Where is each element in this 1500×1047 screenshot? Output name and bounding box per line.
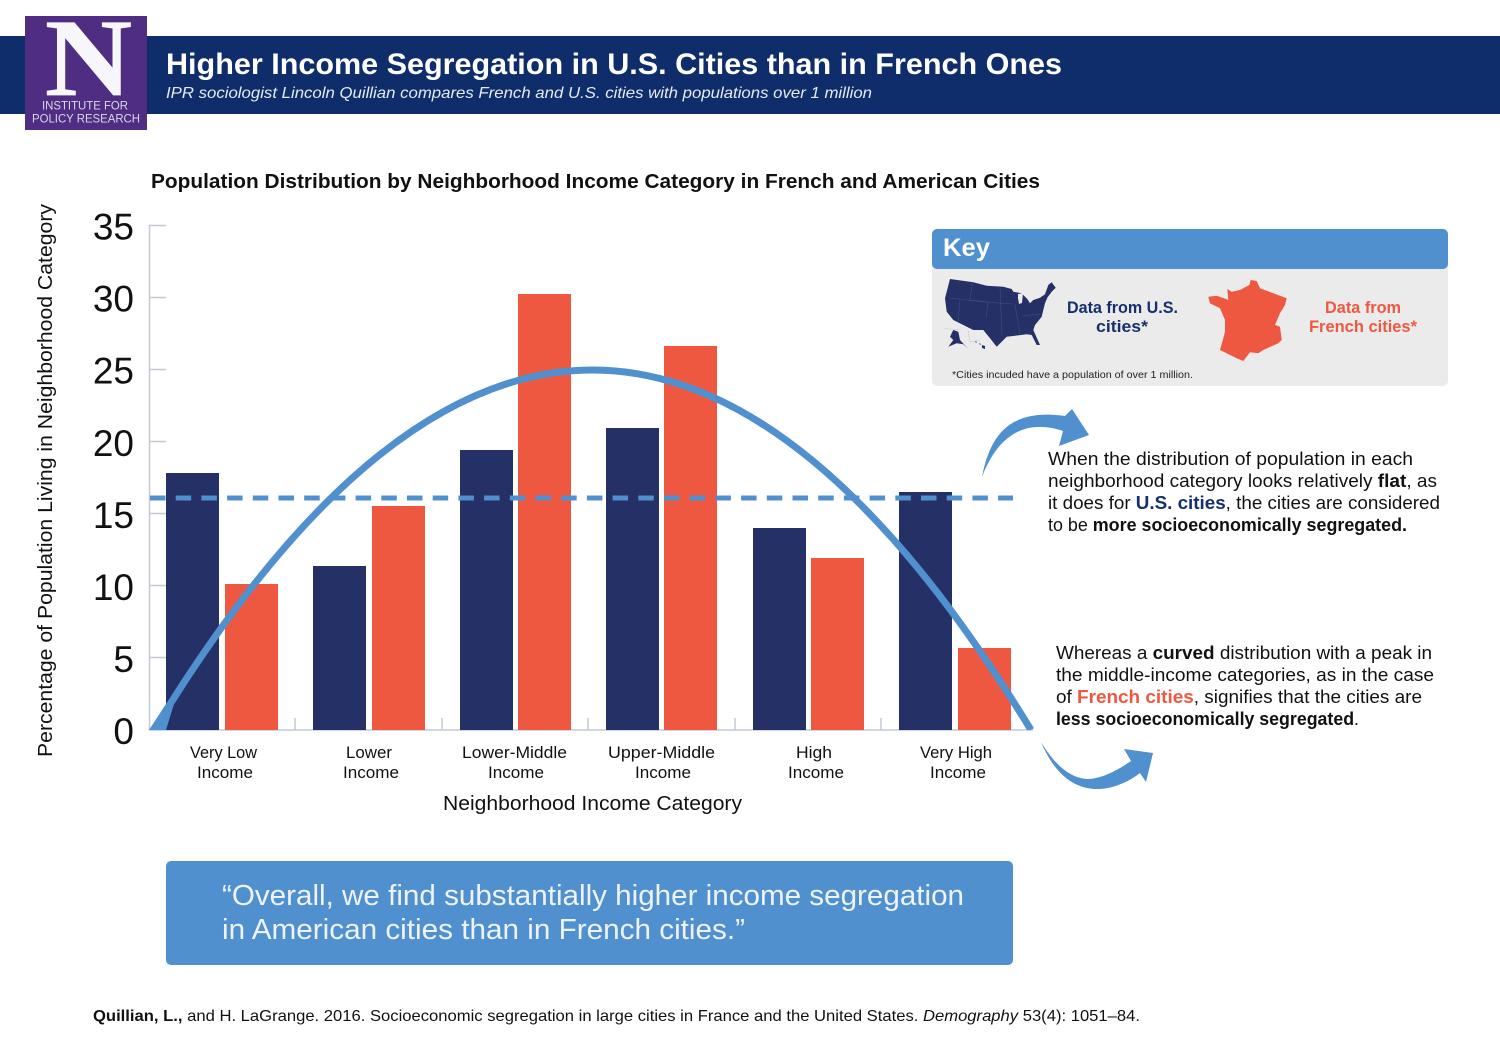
text block: flat distribution: neighborhood category looks relatively flat, as xyxy=(1048,471,1437,491)
text block: flat distribution: to be more socioeconomically segregated. xyxy=(1048,515,1407,535)
y-axis numbers: 35 xyxy=(93,206,134,248)
icon: France map xyxy=(1208,280,1287,361)
text block: curved distribution: the middle-income categories, as in the case xyxy=(1056,665,1434,685)
x-axis title: Neighborhood Income Category xyxy=(443,793,742,815)
arrow: up to flat explanation xyxy=(982,409,1089,477)
category labels: Income xyxy=(930,764,986,782)
text block: curved distribution: less socioeconomically segregated. xyxy=(1056,709,1359,729)
logo: Institute for Policy Research: N xyxy=(45,0,132,119)
category labels: Lower-Middle xyxy=(462,744,567,762)
category labels: Very Low xyxy=(190,744,257,762)
callout: quote: “Overall, we find substantially higher income segregation xyxy=(222,880,964,912)
text block: curved distribution: Whereas a curved distribution with a peak in xyxy=(1056,643,1432,663)
y-axis numbers: 20 xyxy=(93,423,134,464)
y-axis numbers: 30 xyxy=(93,279,134,320)
axes xyxy=(149,226,1033,730)
text block: flat distribution: it does for U.S. cities, the cities are considered xyxy=(1048,493,1440,513)
bars: U.S. cities xyxy=(166,428,952,730)
French key label xyxy=(1309,299,1418,336)
panel: key xyxy=(932,229,1448,386)
French key label: French cities* xyxy=(1309,318,1418,336)
category labels: Income xyxy=(788,764,844,782)
category labels: Upper-Middle xyxy=(608,744,715,762)
subtitle: IPR sociologist Lincoln Quillian compares French and U.S. cities with populations over 1 million xyxy=(166,85,872,102)
French key label: Data from xyxy=(1325,299,1401,317)
U.S. key label xyxy=(1067,299,1178,336)
category labels xyxy=(190,744,992,782)
curved trend line: France xyxy=(149,370,1031,730)
logo: Institute for Policy Research: INSTITUTE FOR xyxy=(42,100,128,112)
logo: Institute for Policy Research: POLICY RESEARCH xyxy=(32,114,140,126)
key header xyxy=(932,229,1448,269)
callout: quote: in American cities than in French cities.” xyxy=(222,914,745,946)
y-axis numbers: 10 xyxy=(93,567,134,608)
y-axis title: Percentage of Population Living in Neighborhood Category xyxy=(35,204,57,757)
category labels: Income xyxy=(635,764,691,782)
title: Higher Income Segregation in U.S. Cities than in French Ones xyxy=(166,48,1062,81)
category labels: Very High xyxy=(920,744,992,762)
text block: flat distribution: When the distribution of population in each xyxy=(1048,449,1413,469)
y-axis numbers: 5 xyxy=(113,639,134,680)
text block: flat distribution xyxy=(1048,449,1440,535)
header banner xyxy=(0,36,1500,114)
text block: curved distribution: of French cities , signifies that the cities are xyxy=(1056,687,1422,707)
icon: U.S. map xyxy=(944,279,1056,349)
category labels: High xyxy=(796,744,832,762)
key footnote: *Cities incuded have a population of over 1 million. xyxy=(952,369,1193,381)
bar chart xyxy=(93,206,1033,782)
category labels: Income xyxy=(343,764,399,782)
y-axis numbers: 15 xyxy=(93,495,134,536)
callout: quote xyxy=(166,861,1013,965)
bars: French cities xyxy=(225,294,1011,730)
text block: curved distribution xyxy=(1056,643,1434,729)
arrow: down from curve explanation xyxy=(1041,742,1153,789)
logo: Institute for Policy Research xyxy=(25,0,147,130)
citation: Quillian, L., and H. LaGrange. 2016. Socioeconomic segregation in large cities in France and the United States. Demography 53(4): 1051–84. xyxy=(93,1008,1140,1025)
y-axis numbers xyxy=(93,206,134,752)
U.S. key label: Data from U.S. xyxy=(1067,299,1178,317)
U.S. key label: cities* xyxy=(1096,318,1149,336)
key title: Key xyxy=(943,234,990,262)
chart heading: Population Distribution by Neighborhood Income Category in French and American Cities xyxy=(151,171,1040,193)
y-axis numbers: 25 xyxy=(93,351,134,392)
category labels: Income xyxy=(197,764,253,782)
flat trend line: U.S. xyxy=(150,496,1013,500)
category labels: Lower xyxy=(346,744,393,762)
y-axis numbers: 0 xyxy=(113,711,134,752)
category labels: Income xyxy=(488,764,544,782)
